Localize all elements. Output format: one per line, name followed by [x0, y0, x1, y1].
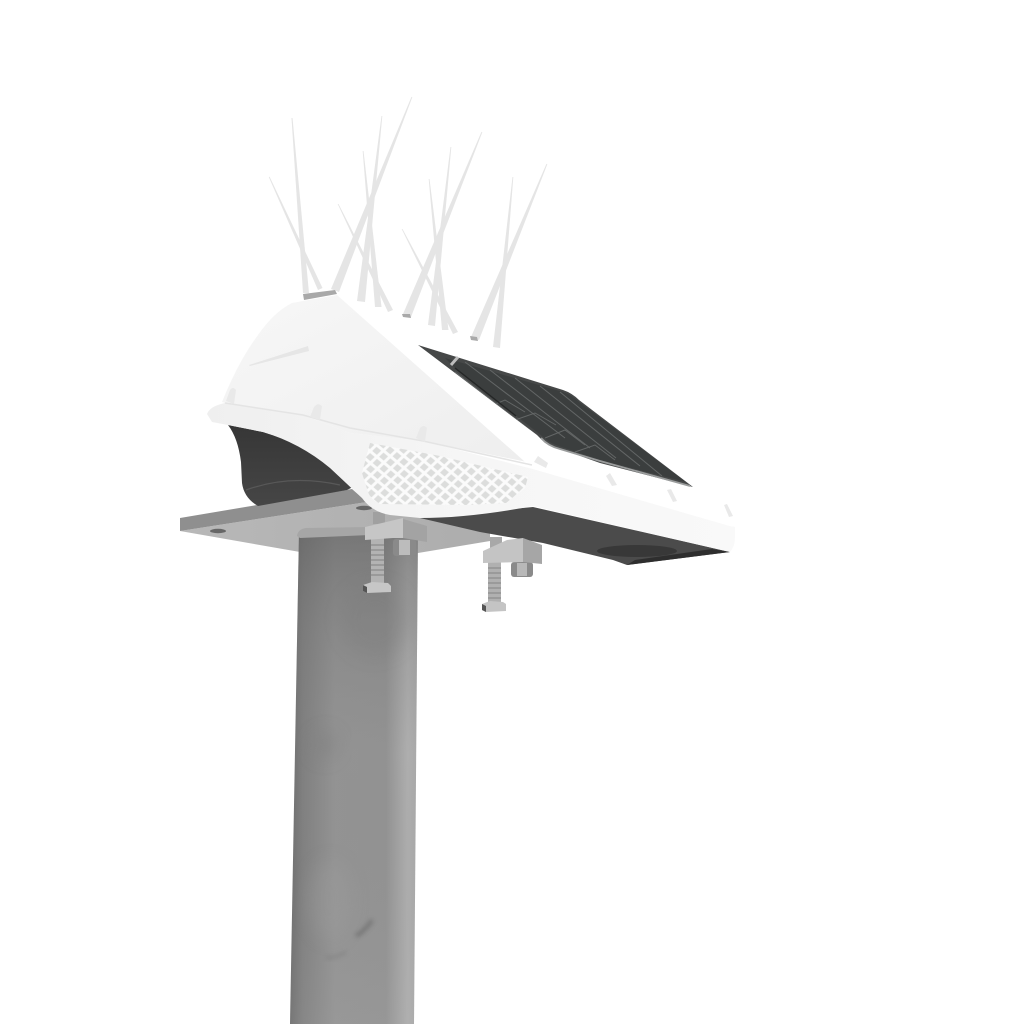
right clamp and bolt [482, 537, 542, 612]
mounting pole [290, 527, 418, 1024]
top white body [337, 295, 733, 527]
illustration: solar unit on pole [180, 97, 733, 1024]
bird spikes [269, 97, 547, 348]
solar panel [418, 345, 693, 487]
dome ridge slot [249, 346, 309, 366]
mounting plate [180, 489, 490, 553]
left clamp and bolt [363, 512, 427, 593]
housing rim [207, 403, 735, 552]
right underside [420, 507, 730, 565]
rim top edge shadow [225, 403, 532, 465]
spike base clips [303, 290, 478, 341]
housing dome [222, 295, 532, 463]
rear dark underside [228, 425, 357, 506]
rim nubs [226, 388, 733, 517]
reflector strip [362, 443, 528, 505]
